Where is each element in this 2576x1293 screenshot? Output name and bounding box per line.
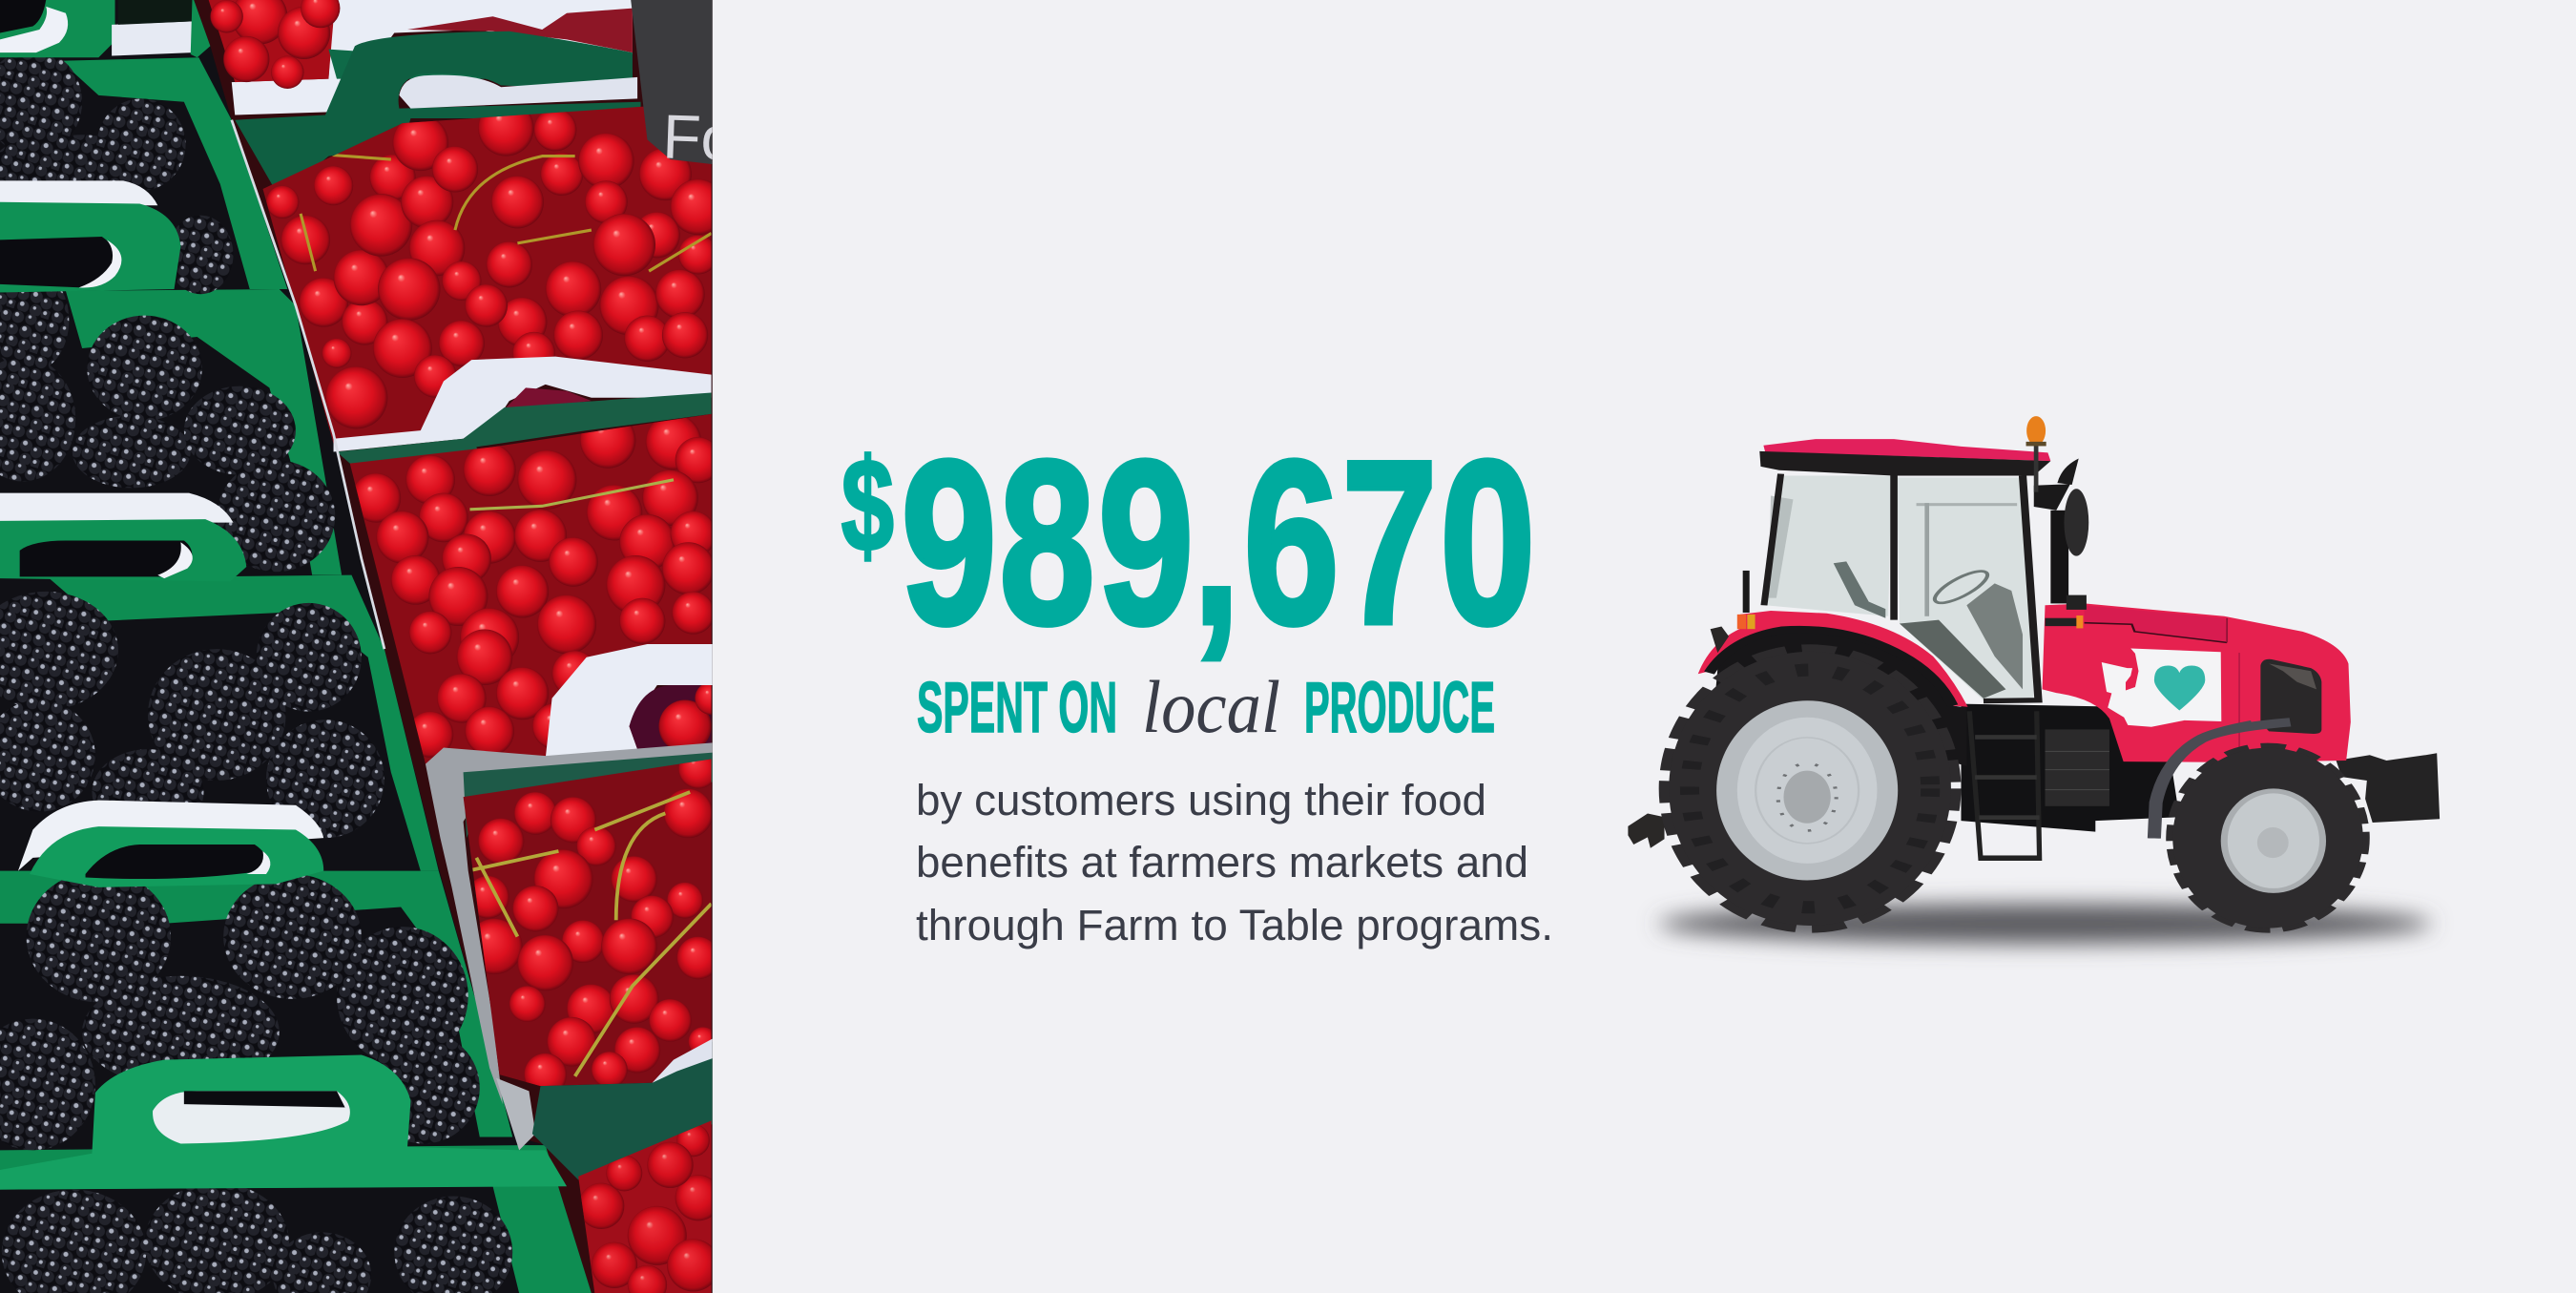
line 1: by customers using their food <box>916 776 1486 824</box>
local script word: local <box>1142 665 1280 748</box>
panel: photo of berries in green cartons <box>0 0 737 1293</box>
chalkboard sign: Fo <box>661 101 737 174</box>
chassis <box>1961 704 2179 832</box>
white carton card top <box>232 0 633 115</box>
purple gap in card <box>506 387 592 407</box>
hood <box>2043 603 2351 762</box>
green carton walls <box>0 57 592 1293</box>
digits: 989,670 <box>901 411 1536 673</box>
carton handle 5 <box>0 1054 567 1190</box>
carton handle 1 <box>0 0 210 57</box>
body text <box>916 776 1553 949</box>
grille vent <box>2260 659 2321 734</box>
blackberry clusters <box>0 50 512 1293</box>
rear hitch <box>1628 813 1665 848</box>
front fender <box>2154 722 2290 838</box>
dashboard column <box>1966 583 2023 689</box>
fender inner arc <box>1709 630 1953 706</box>
rear tire <box>1667 650 1953 928</box>
rear fender <box>1698 611 1968 707</box>
grey carton corner <box>496 1078 535 1150</box>
front tire <box>2171 746 2364 929</box>
currants top <box>209 0 340 89</box>
dark red gap at top right <box>407 9 633 52</box>
dark green wall lower <box>464 753 713 838</box>
rear lights <box>1711 571 1755 653</box>
white card mid <box>334 357 712 452</box>
amber beacon <box>2026 416 2046 492</box>
line 3: through Farm to Table programs. <box>916 901 1553 949</box>
divider highlight <box>232 120 384 649</box>
steering wheel <box>1928 567 1994 608</box>
subheading: spent on local produce <box>917 665 1495 748</box>
red currant mass 4 <box>578 1120 712 1293</box>
carton handle 3 <box>0 493 246 582</box>
currant stems 3 <box>468 792 712 1076</box>
currant stems 2 <box>469 480 674 510</box>
produce: PRODUCE <box>1304 667 1495 747</box>
dollar sign: $ <box>841 432 894 579</box>
red currant mass 1 <box>263 107 712 443</box>
line 2: benefits at farmers markets and <box>916 838 1528 886</box>
tractor illustration <box>1628 416 2440 944</box>
chalkboard sign <box>631 0 713 164</box>
currant stems 1 <box>301 155 712 271</box>
green handle top <box>235 31 641 198</box>
dark green wall bottom right <box>532 1042 713 1179</box>
cab windows <box>1765 475 2034 700</box>
cab frame <box>1764 474 2038 701</box>
grey carton edge <box>426 742 713 1104</box>
ground shadow <box>1659 904 2431 944</box>
carton handle 2 <box>0 180 180 292</box>
roof underside <box>1759 451 2050 475</box>
red currant mass 3 <box>464 760 712 1086</box>
front fender over tire <box>2154 724 2253 838</box>
white inside handle top <box>399 75 637 109</box>
currants in card hole <box>630 685 712 748</box>
exhaust and mirror <box>2034 458 2088 628</box>
big number: $989,670 <box>841 411 1536 673</box>
seat <box>1834 561 1885 618</box>
spent on: SPENT ON <box>917 667 1117 747</box>
dark wheel arch <box>1714 630 1966 766</box>
Washington state decal <box>2102 648 2221 727</box>
currant side base <box>194 0 713 1293</box>
white edge of wall <box>653 1038 713 1083</box>
carton handle 4 <box>18 801 323 887</box>
white card lower <box>546 644 713 760</box>
dark green band mid <box>339 393 712 464</box>
heart icon <box>2154 665 2205 711</box>
front weight <box>2337 753 2440 823</box>
cab roof <box>1763 439 2050 461</box>
hood panel shading <box>2085 605 2227 642</box>
red currant mass 2 <box>349 414 712 763</box>
steps <box>1969 711 2109 861</box>
